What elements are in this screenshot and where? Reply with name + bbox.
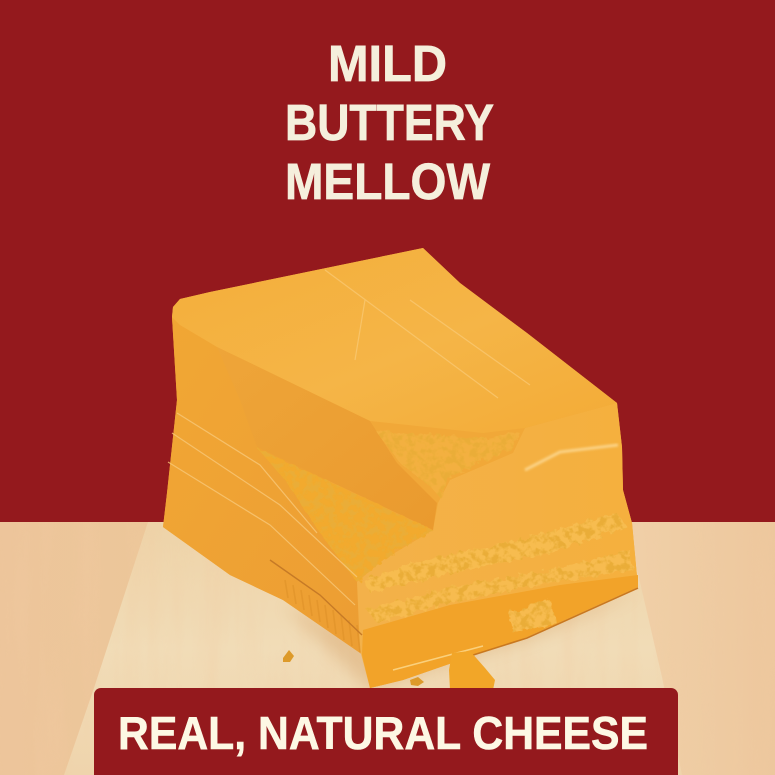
cheese: rough patch [510, 600, 557, 633]
cheese: left face [163, 317, 380, 655]
cheese: rough row two [367, 550, 633, 623]
cheese: base edge shadow [470, 588, 638, 656]
cheese block [163, 248, 638, 690]
cheese: silhouette base [163, 248, 638, 688]
cheese: bottom band [362, 575, 638, 688]
title line three: MELLOW [285, 153, 491, 210]
title line two: BUTTERY [285, 94, 494, 151]
cheese: dark split [270, 560, 362, 635]
cheese: top face [172, 248, 617, 433]
cheese: bottom band highlight [393, 646, 483, 670]
wooden table background [0, 522, 775, 775]
cheese: right face ledge lines [525, 445, 618, 470]
cheese: front slab [217, 347, 437, 530]
cheese: score marks on top [325, 270, 530, 398]
cheese: ribbed lower left edge [285, 580, 360, 652]
title: flavour words [285, 35, 494, 210]
cheese: right and front body [357, 403, 638, 688]
cheese: lower crumbled face [257, 448, 433, 582]
cheese: crumbs [283, 650, 495, 690]
bottom banner [94, 688, 678, 775]
cheese: rough row one [363, 513, 627, 593]
cheese: soft shadow [283, 592, 638, 690]
cheese: upper crumbled face [375, 430, 520, 498]
cheese: left face layer lines [168, 413, 357, 605]
title line one: MILD [328, 35, 447, 92]
banner text: REAL, NATURAL CHEESE [118, 707, 648, 759]
